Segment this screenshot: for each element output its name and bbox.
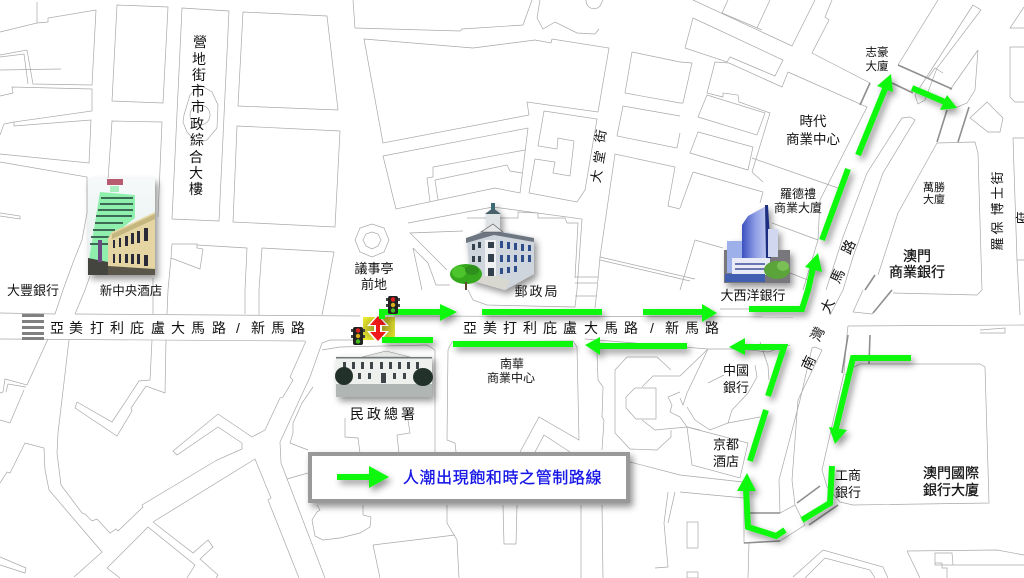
- pedestrian crossing stripes: [22, 314, 44, 340]
- label: Bank of China: 銀行: [723, 380, 749, 395]
- label: Chi Hou building: 大廈: [866, 59, 889, 73]
- legend box: [308, 452, 630, 503]
- label: Avenida da Praia Grande: 大: [817, 296, 838, 316]
- route: to Bank of China: [729, 338, 784, 396]
- label: post office: 郵政局: [514, 284, 560, 299]
- label: Rua da Se: [588, 129, 609, 184]
- label: Rua da Se: 街: [592, 129, 609, 144]
- vertical label: municipal market: 街: [192, 67, 206, 83]
- label: Hang Seng bank: 大豐銀行: [7, 283, 59, 298]
- vertical label: municipal market: 大: [189, 165, 203, 181]
- route: avenue westbound: [585, 337, 687, 355]
- label: Nam Wa centre: 南華: [500, 356, 524, 371]
- label: Avenida da Praia Grande: 南: [798, 353, 819, 373]
- label: BNU bank: 大西洋銀行: [720, 288, 786, 303]
- label: Rua da Se: 堂: [591, 150, 608, 165]
- photo: bank building: [724, 205, 790, 283]
- photo: civic building: [335, 351, 433, 397]
- label: Avenida da Praia Grande: 路: [838, 237, 859, 257]
- route: avenue segment: [482, 309, 602, 315]
- vertical label: municipal market: 營: [193, 34, 207, 50]
- label: Senado square: 議事亭: [354, 261, 394, 276]
- label: ICBC: 工商: [835, 468, 861, 483]
- label: Time commercial centre: 商業中心: [786, 132, 840, 147]
- vertical label: municipal market: 綜: [190, 132, 204, 148]
- vertical label: municipal market: 樓: [189, 181, 203, 197]
- vertical label: municipal market: 政: [190, 116, 204, 132]
- label: Rua Dr. Pedro Lobo: 羅: [990, 237, 1005, 251]
- legend text: 人潮出現飽和時之管制路線: [403, 468, 602, 487]
- route: to bank: [643, 304, 717, 322]
- route: civic square to post office: [382, 304, 457, 321]
- label: Rodrigues commercial building: 商業大廈: [774, 200, 822, 215]
- label: Nam Wa centre: 商業中心: [487, 370, 535, 385]
- label: Rua da Se: 大: [588, 169, 605, 184]
- route: bank turn north: [749, 253, 822, 309]
- label: Man Seng building: 大廈: [923, 192, 945, 206]
- vertical label: municipal market: 合: [189, 149, 203, 165]
- label: Sintra hotel: 新中央酒店: [100, 283, 162, 298]
- label: Senado square: 前地: [361, 277, 387, 292]
- route: across the road: [912, 88, 957, 110]
- traffic light: [351, 327, 365, 345]
- label: Kyoto hotel: 京都: [713, 437, 739, 452]
- label: Rua Dr. Pedro Lobo: 博: [990, 202, 1005, 216]
- vertical label: municipal market: 市: [191, 99, 205, 115]
- road crossing markings: [744, 65, 969, 543]
- vertical label: municipal market: 市: [191, 83, 205, 99]
- label: Rua Dr. Pedro Lobo: 街: [990, 171, 1005, 185]
- label: Macau international bank building: 銀行大廈: [923, 482, 979, 498]
- label: ICBC: 銀行: [835, 485, 861, 500]
- route: to Chi Hou: [858, 74, 893, 155]
- route: turn south: [829, 358, 911, 444]
- label: Banco Comercial de Macau: 澳門: [903, 248, 931, 264]
- red double arrow: [367, 314, 389, 344]
- label: avenue name west: 亞美打利庇盧大馬路/新馬路: [50, 320, 305, 336]
- label: Chi Hou building: 志豪: [866, 45, 888, 59]
- icon: tree at bank: [764, 261, 790, 279]
- icon: tree at post office: [450, 264, 482, 290]
- label: Rodrigues commercial building: 羅德禮: [780, 186, 816, 201]
- traffic light: [386, 296, 400, 314]
- label: Time commercial centre: 時代: [800, 114, 827, 129]
- legend arrow: [337, 466, 389, 488]
- label: Rua Dr. Pedro Lobo: 士: [990, 186, 1005, 200]
- label: Man Seng building: 萬勝: [923, 180, 945, 194]
- label: Avenida da Praia Grande: 灣: [807, 324, 828, 344]
- label: Avenida da Praia Grande: [798, 237, 859, 373]
- label: Kyoto hotel: 酒店: [713, 454, 739, 469]
- photo: hotel Sintra building: [88, 178, 155, 275]
- label: Macau international bank building: 澳門國際: [923, 465, 979, 481]
- label: avenue name east: 亞美打利庇盧大馬路/新馬路: [463, 320, 719, 336]
- label: Banco Comercial de Macau: 商業銀行: [889, 264, 945, 280]
- label: Avenida da Praia Grande: 馬: [827, 266, 848, 286]
- vertical label: municipal market: 地: [192, 51, 206, 67]
- label: civic affairs bureau: 民政總署: [350, 406, 415, 422]
- green route arrows: [382, 74, 957, 536]
- route: bottom U turn: [737, 473, 785, 536]
- photo: post office building: [466, 203, 534, 290]
- yellow crossing box: [363, 317, 395, 340]
- label: Rua Dr. Pedro Lobo: 保: [990, 221, 1005, 235]
- label: Rua Dr. Pedro Lobo: [990, 171, 1024, 251]
- label: Bank of China: 中國: [723, 363, 749, 378]
